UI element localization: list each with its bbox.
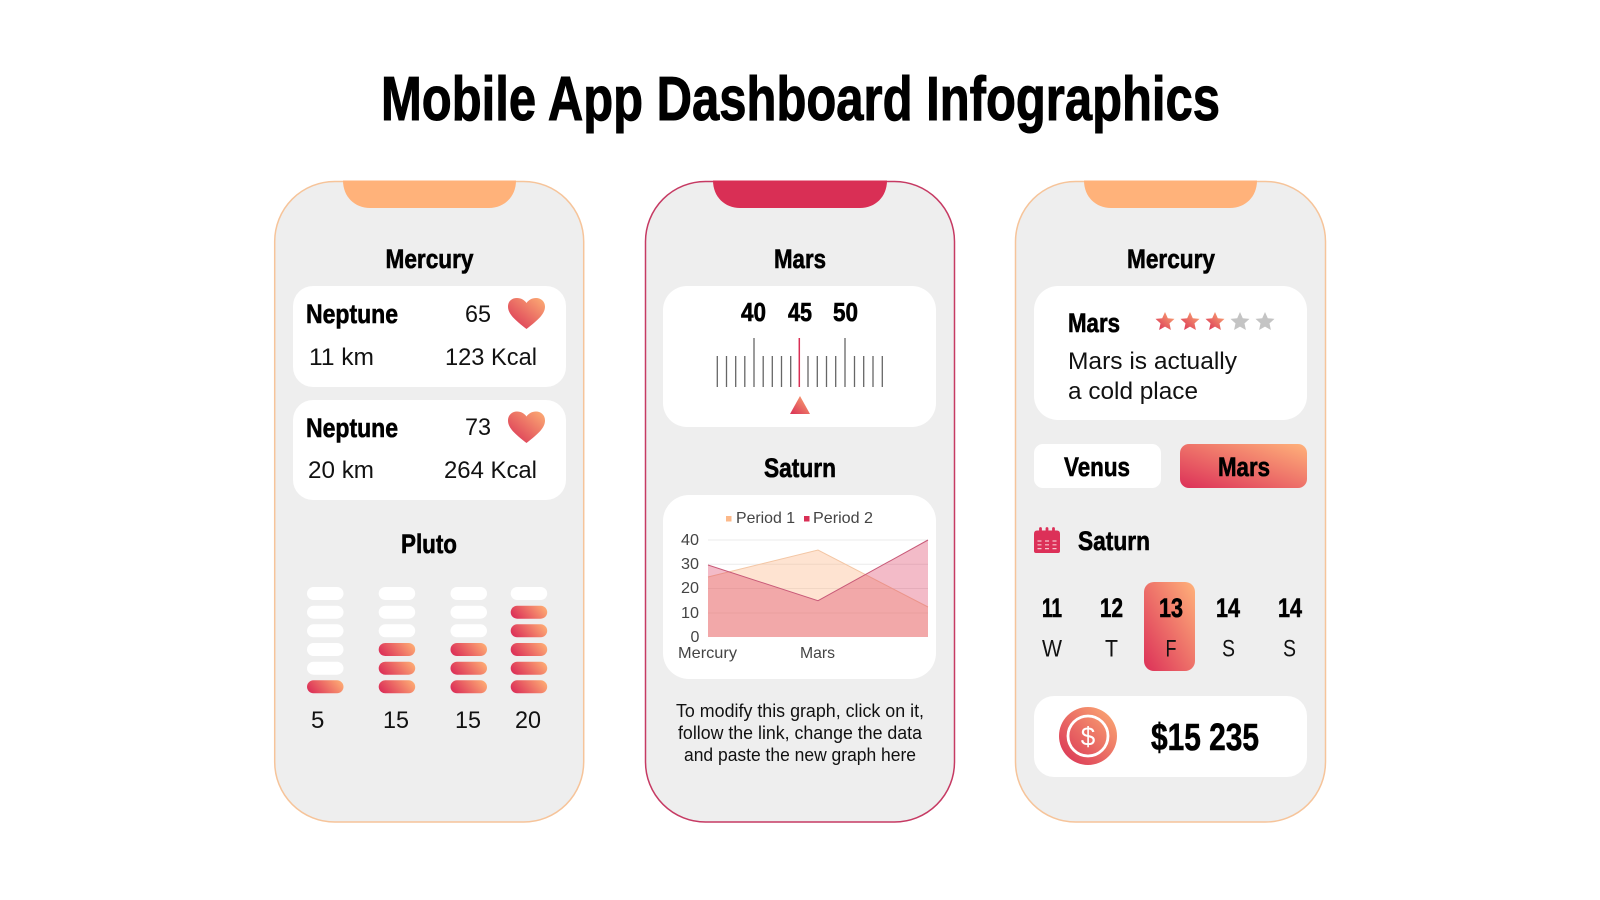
y axis labels	[681, 532, 700, 646]
x axis labels	[678, 645, 835, 662]
calendar days: 13	[1159, 593, 1183, 623]
text block: chart note: To modify this graph, click on it,	[676, 700, 924, 721]
panel: phone 2 gauge and chart	[646, 180, 954, 822]
x axis labels: Mercury	[678, 645, 737, 662]
area chart card	[663, 495, 936, 679]
calendar days: W	[1042, 636, 1062, 662]
bar chart: Pluto levels	[307, 587, 547, 734]
button: Venus: Venus	[1064, 452, 1130, 482]
calendar days: 12	[1100, 593, 1123, 623]
heading: Mercury: Mercury	[1127, 244, 1215, 274]
card: rating: a cold place	[1068, 378, 1198, 405]
card: rating: Mars	[1068, 308, 1120, 338]
calendar days: 14	[1278, 593, 1302, 623]
button: Mars: Mars	[1218, 452, 1270, 482]
area: period 2	[708, 540, 928, 637]
card: amount: $15 235	[1151, 717, 1259, 759]
gauge pointer	[790, 396, 810, 414]
card: Neptune 73: 20 km	[308, 457, 374, 484]
y axis labels: 40	[681, 532, 699, 549]
bar chart: Pluto levels: 5	[311, 707, 324, 734]
bar chart: Pluto levels: 20	[515, 707, 541, 734]
heading: Pluto: Pluto	[401, 529, 457, 559]
card: rating	[1034, 286, 1307, 420]
calendar days: 11	[1042, 593, 1062, 623]
chart legend	[726, 510, 873, 527]
card: Neptune 73: 73	[465, 414, 491, 441]
calendar days: F	[1166, 636, 1176, 662]
button: Mars	[1180, 444, 1307, 488]
chart legend: Period 2	[813, 510, 873, 527]
icon: heart	[508, 412, 545, 443]
panel: phone 3 rating and calendar	[1016, 180, 1326, 822]
gauge needle	[798, 338, 800, 387]
selected day	[1144, 582, 1195, 671]
gauge ticks	[717, 338, 882, 387]
title: Mobile App Dashboard Infographics	[381, 65, 1220, 134]
card: Neptune 65: 11 km	[309, 344, 374, 371]
heading: Mercury: Mercury	[386, 244, 474, 274]
phone body	[1016, 182, 1326, 822]
icon: heart	[508, 298, 545, 329]
card: gauge: 50	[833, 297, 858, 327]
heading: Mars: Mars	[774, 244, 826, 274]
card: Neptune 65: Neptune	[306, 299, 398, 329]
area: period 1	[708, 550, 928, 637]
calendar days: S	[1283, 636, 1296, 662]
phone notch	[713, 180, 887, 208]
card: Neptune 65	[293, 286, 566, 387]
calendar days	[1042, 582, 1302, 671]
card: Neptune 65: 123 Kcal	[445, 344, 537, 371]
card: Neptune 73: 264 Kcal	[444, 457, 537, 484]
y axis labels: 0	[690, 629, 700, 646]
card: rating: Mars is actually	[1068, 348, 1237, 375]
text block: chart note	[676, 700, 924, 765]
y axis labels: 10	[681, 605, 699, 622]
calendar days: 14	[1216, 593, 1240, 623]
card: gauge	[663, 286, 936, 427]
y axis labels: 20	[681, 580, 699, 597]
card: gauge: 40	[741, 297, 766, 327]
icon: calendar	[1034, 528, 1060, 553]
panel: phone 1 fitness	[275, 180, 584, 822]
card: Neptune 73: Neptune	[306, 413, 398, 443]
phone body	[646, 182, 954, 822]
card: Neptune 73	[293, 400, 566, 500]
calendar days: S	[1222, 636, 1235, 662]
calendar days: T	[1105, 636, 1118, 662]
phone notch	[1084, 180, 1257, 208]
card: gauge: 45	[788, 297, 812, 327]
y axis labels: 30	[681, 556, 699, 573]
card: amount	[1034, 696, 1307, 777]
phone notch	[343, 180, 516, 208]
button: Venus	[1034, 444, 1161, 488]
heading: Saturn: Saturn	[1078, 526, 1150, 556]
icon: dollar coin	[1059, 707, 1117, 765]
heading: Saturn: Saturn	[764, 453, 836, 483]
icon: dollar coin: $	[1081, 722, 1096, 752]
bar chart: Pluto levels: 15	[455, 707, 481, 734]
bar chart: Pluto levels: 15	[383, 707, 409, 734]
x axis labels: Mars	[800, 645, 835, 662]
phone body	[275, 182, 584, 822]
chart legend: Period 1	[736, 510, 795, 527]
text block: chart note: and paste the new graph here	[684, 744, 916, 765]
card: Neptune 65: 65	[465, 301, 491, 328]
text block: chart note: follow the link, change the data	[678, 722, 923, 743]
icon: star rating	[1156, 312, 1274, 330]
gridlines	[708, 540, 928, 613]
